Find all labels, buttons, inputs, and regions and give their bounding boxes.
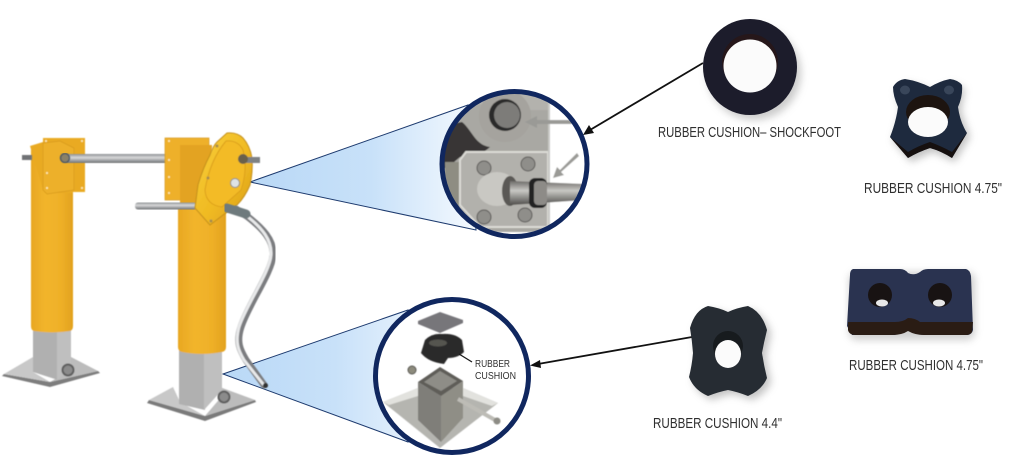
gear teeth edge bbox=[445, 162, 459, 212]
bottom circle ring bbox=[376, 300, 528, 452]
left leg silver inner tube bbox=[33, 328, 58, 380]
right leg yellow tube bbox=[178, 205, 226, 354]
lower mounting plate bbox=[460, 152, 548, 227]
grey pointer arrow right bbox=[553, 153, 579, 178]
cross bolt bbox=[458, 399, 495, 420]
gearbox close-up photo bbox=[444, 94, 582, 232]
right leg foot bolt bbox=[218, 392, 230, 402]
shaft boss bbox=[477, 172, 510, 206]
product: rubber cushion 4.4 inch bbox=[689, 306, 771, 400]
left leg yellow tube bbox=[31, 147, 73, 332]
label: 4.75 inch double-hole: RUBBER CUSHION 4.75" bbox=[849, 358, 983, 374]
label: 4.4 inch: RUBBER CUSHION 4.4" bbox=[653, 416, 782, 432]
spare nut bbox=[408, 366, 416, 374]
gearbox badge bbox=[230, 178, 240, 188]
top circle ring bbox=[442, 92, 587, 236]
right landing leg bbox=[147, 138, 256, 421]
upper hub with seal bbox=[482, 94, 530, 110]
white backdrop bbox=[550, 120, 577, 202]
rubber cushion block bbox=[421, 334, 464, 364]
crank handle bbox=[227, 208, 273, 388]
zoom cone: foot to detail circle bbox=[223, 310, 408, 442]
foot plate bbox=[384, 396, 498, 448]
cap plate bbox=[418, 312, 463, 333]
left landing leg bbox=[2, 138, 100, 387]
label: rubber cushion: CUSHION bbox=[475, 371, 516, 382]
dark casting bbox=[440, 122, 490, 168]
leader line to cushion bbox=[459, 354, 472, 362]
right leg base plate bbox=[147, 400, 256, 421]
product: rubber cushion shockfoot bbox=[703, 19, 801, 120]
grey pointer arrow top bbox=[526, 116, 572, 128]
label: rubber cushion bbox=[475, 359, 516, 382]
product: rubber cushion 4.75 inch double-hole bbox=[847, 269, 975, 340]
left leg foot bolt bbox=[62, 364, 74, 376]
yellow gearbox bbox=[195, 133, 260, 225]
label: rubber cushion: RUBBER bbox=[475, 359, 510, 370]
label: shockfoot: RUBBER CUSHION– SHOCKFOOT bbox=[658, 125, 841, 141]
gearbox output stud bbox=[243, 157, 260, 163]
shaft bbox=[510, 181, 585, 205]
right leg bracket bbox=[165, 138, 209, 200]
product: rubber cushion 4.75 inch four-lobe bbox=[890, 79, 970, 162]
top detail circle bbox=[440, 87, 593, 237]
connecting cross shaft bbox=[22, 154, 167, 163]
arrow: shockfoot cushion to top circle bbox=[583, 63, 703, 135]
lower operating shaft bbox=[135, 202, 197, 210]
left leg base plate bbox=[2, 371, 100, 387]
mounting bolts bbox=[477, 157, 535, 224]
arrow: 4.4 inch cushion to bottom circle bbox=[530, 337, 692, 368]
shaft collar bbox=[529, 178, 547, 208]
recessed bolts bbox=[900, 86, 910, 94]
right leg silver inner tube bbox=[179, 350, 205, 410]
zoom cone: gearbox to detail circle bbox=[250, 105, 476, 230]
exploded foot diagram bbox=[383, 312, 500, 448]
left leg bracket bbox=[30, 138, 85, 193]
socket body bbox=[418, 382, 441, 442]
bottom detail circle bbox=[375, 299, 529, 453]
